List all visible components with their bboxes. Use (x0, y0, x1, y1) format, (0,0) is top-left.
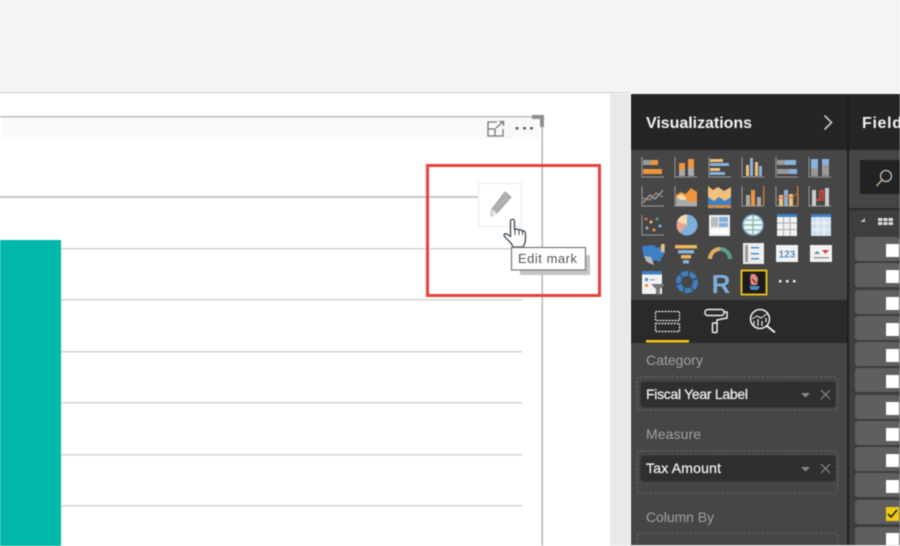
icon: collapse chevron (824, 116, 832, 130)
icon: format paint roller (705, 310, 727, 332)
icon: hand cursor (504, 219, 526, 247)
ribbon bar (0, 0, 900, 94)
visual frame (0, 115, 544, 546)
field well label: Category: Category (646, 352, 703, 368)
field well label: Column By: Column By (646, 509, 714, 525)
field well label: Measure: Measure (646, 426, 701, 442)
report canvas gutter (610, 94, 630, 546)
panel: Visualizations (631, 94, 847, 546)
pane tabs (631, 300, 847, 343)
bar chart column (0, 240, 61, 546)
icon: analytics magnifier (750, 310, 775, 332)
visual gallery row 5: R (712, 269, 731, 299)
icon: more options (516, 127, 533, 130)
icon: focus mode (488, 122, 504, 136)
tooltip: Edit mark: Edit mark (518, 251, 578, 266)
edit mark button with pencil icon (478, 184, 522, 226)
panel: Fields (849, 94, 900, 546)
visual gallery row 5 (642, 269, 796, 299)
visual gallery row 3 (642, 214, 831, 236)
visual gallery row 1 (642, 157, 831, 177)
search box (849, 150, 900, 208)
tooltip: Edit mark (512, 248, 590, 275)
visual gallery row 4: 123 (779, 250, 796, 260)
visual gallery row 2 (642, 186, 831, 209)
visual gallery row 4 (642, 243, 832, 265)
field well: Fiscal Year Label (637, 377, 838, 410)
panel separator (847, 94, 849, 546)
icon: more visuals (779, 280, 796, 282)
panel header (631, 94, 847, 150)
field well: empty (637, 533, 838, 546)
field well: Tax Amount (637, 451, 838, 493)
callout: red highlight box (428, 166, 600, 296)
heading: Visualizations: Visualizations (646, 115, 752, 132)
field list rows (855, 237, 900, 546)
checked field checkbox (886, 507, 899, 521)
active tab underline (646, 340, 689, 342)
field checkboxes (886, 244, 899, 546)
selected custom visual icon (742, 270, 766, 294)
chart gridlines (0, 196, 522, 506)
field well: Tax Amount: Tax Amount (646, 460, 721, 476)
bottom edge (630, 545, 900, 546)
table header icons (860, 218, 893, 225)
field well: Fiscal Year Label: Fiscal Year Label (646, 386, 748, 402)
icon: fields tab (656, 312, 680, 332)
